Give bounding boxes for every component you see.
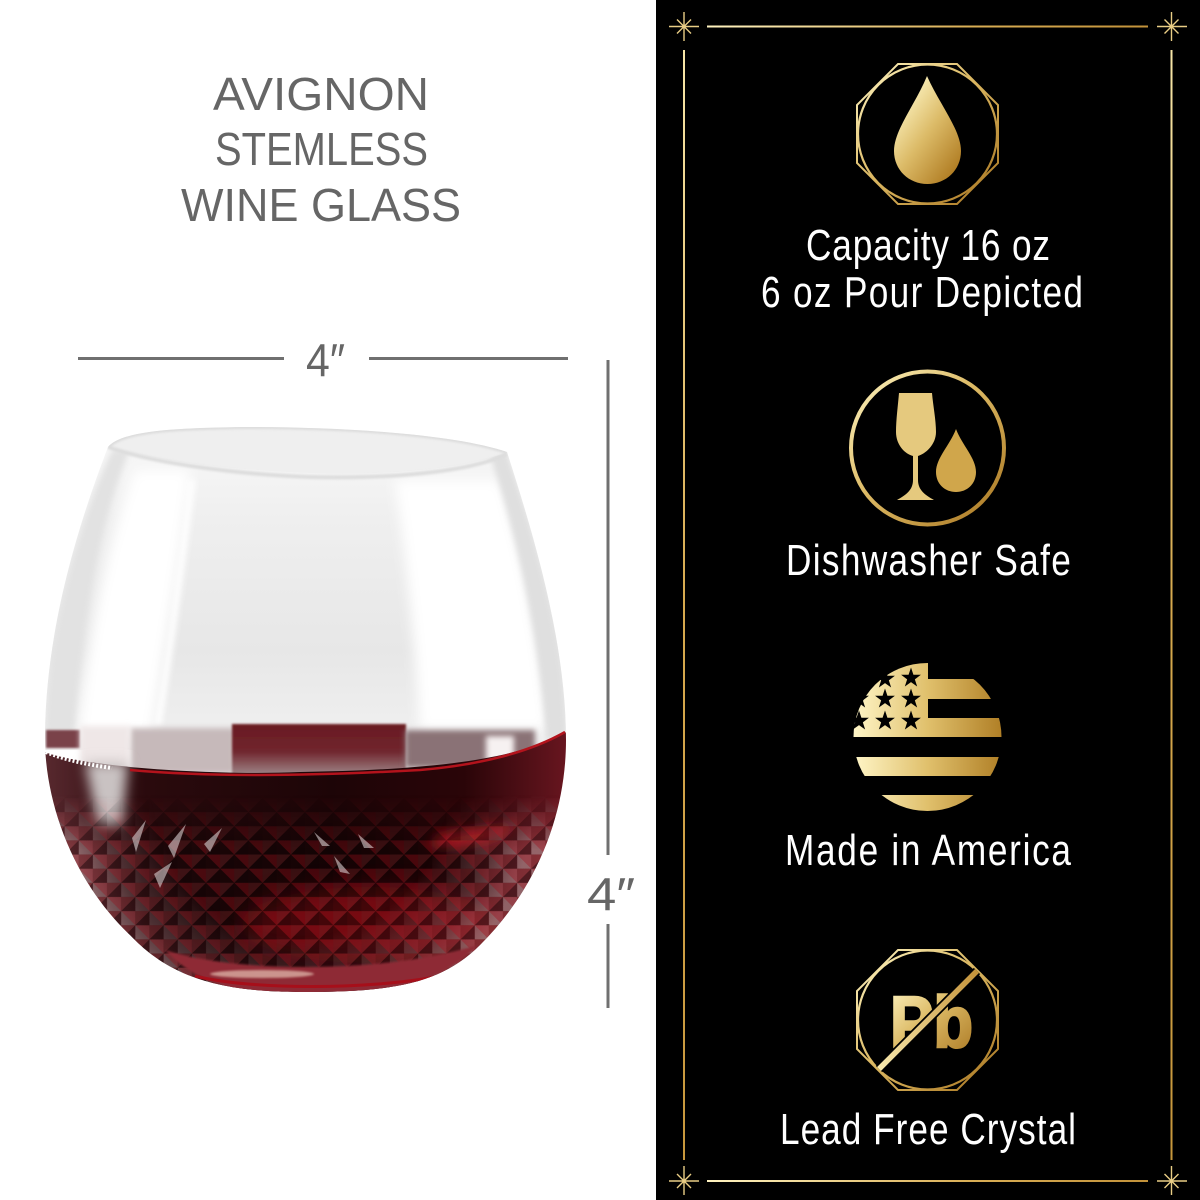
width dimension: 4 inches: 4″ — [306, 334, 345, 386]
rim — [118, 430, 468, 446]
title: WINE GLASS — [181, 179, 461, 231]
corner stars — [669, 12, 1187, 1195]
width dimension: 4 inches — [78, 334, 568, 386]
icon: capacity drop — [857, 64, 998, 204]
title: AVIGNON — [213, 68, 429, 120]
base of glass — [165, 945, 478, 995]
dishwasher safe text: Dishwasher Safe — [786, 536, 1071, 585]
lead free crystal text: Lead Free Crystal — [780, 1105, 1076, 1154]
icon: lead free: Pb — [890, 983, 973, 1063]
title: STEMLESS — [215, 123, 428, 175]
icon: dishwasher safe — [851, 372, 1004, 524]
upper glass — [45, 451, 566, 750]
icon: american flag — [849, 663, 1002, 811]
capacity text: Capacity 16 oz — [806, 221, 1050, 270]
icon: lead free — [857, 950, 998, 1090]
panel: features — [656, 0, 1200, 1200]
title — [181, 68, 461, 231]
wine glass illustration — [40, 420, 570, 1000]
reflected wine surface — [130, 728, 235, 774]
diamond cut base — [54, 801, 558, 992]
made in america text: Made in America — [785, 826, 1072, 875]
gold frame — [683, 26, 1172, 1182]
capacity text — [761, 221, 1083, 317]
height dimension: 4 inches: 4″ — [587, 868, 635, 920]
wine — [40, 730, 570, 1000]
height dimension: 4 inches — [587, 360, 635, 1008]
specular facets — [132, 820, 374, 888]
capacity text: 6 oz Pour Depicted — [761, 268, 1083, 317]
